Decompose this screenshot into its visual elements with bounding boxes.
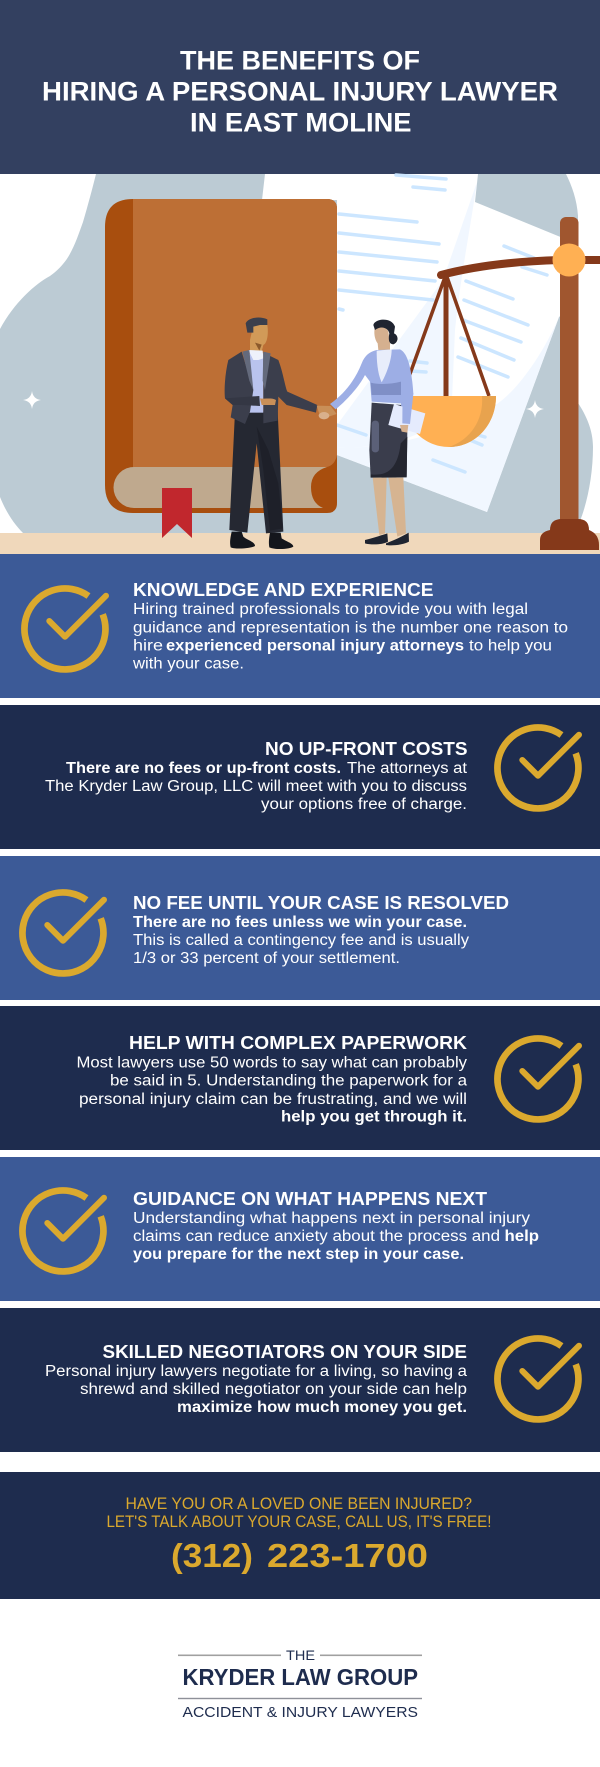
body text xyxy=(132,601,568,672)
body text xyxy=(133,1210,539,1263)
call to action text: LET'S TALK ABOUT YOUR CASE, CALL US, IT'S FREE! xyxy=(106,1513,492,1531)
body text: Hiring trained professionals to provide you with legal xyxy=(133,601,528,618)
body text xyxy=(45,1363,467,1416)
panel: no up-front costs xyxy=(0,705,600,849)
icon: check mark in circle xyxy=(22,892,104,973)
body text: shrewd and skilled negotiator on your side can help xyxy=(80,1381,467,1398)
title: IN EAST MOLINE xyxy=(190,108,412,138)
call to action text xyxy=(106,1495,492,1531)
law book xyxy=(105,199,337,513)
panel: skilled negotiators on your side xyxy=(0,1308,600,1452)
body text: help xyxy=(504,1228,539,1245)
body text: you prepare for the next step in your case. xyxy=(133,1246,464,1263)
phone number: (312) xyxy=(171,1537,253,1574)
body text xyxy=(133,914,469,967)
body text: The Kryder Law Group, LLC will meet with you to discuss xyxy=(45,778,467,795)
background blob xyxy=(0,174,593,533)
call to action panel xyxy=(0,1472,600,1599)
panel: guidance on what happens next xyxy=(0,1157,600,1301)
title xyxy=(42,46,558,138)
documents xyxy=(262,174,580,512)
body text: claims can reduce anxiety about the process and xyxy=(133,1228,500,1245)
logo: The Kryder Law Group: KRYDER LAW GROUP xyxy=(182,1664,418,1690)
icon: check mark in circle xyxy=(497,1038,579,1119)
body text: personal injury claim can be frustrating, and we will xyxy=(79,1091,467,1108)
body text: experienced personal injury attorneys xyxy=(166,638,464,654)
heading: HELP WITH COMPLEX PAPERWORK xyxy=(129,1033,467,1053)
illustration: lawyers shaking hands in front of a law book and scales xyxy=(0,174,600,554)
icon: check mark in circle xyxy=(497,727,579,808)
woman with document xyxy=(330,320,425,545)
body text: Personal injury lawyers negotiate for a living, so having a xyxy=(45,1363,467,1380)
scales of justice xyxy=(402,217,600,550)
heading: SKILLED NEGOTIATORS ON YOUR SIDE xyxy=(102,1342,467,1362)
body text: The attorneys at xyxy=(347,760,468,777)
bookmark xyxy=(162,488,192,538)
heading: KNOWLEDGE AND EXPERIENCE xyxy=(133,580,434,600)
body text: There are no fees or up-front costs. xyxy=(66,760,341,777)
phone number: 223-1700 xyxy=(267,1537,428,1574)
body text: hire xyxy=(133,638,163,654)
body text xyxy=(76,1054,467,1126)
body text: Most lawyers use 50 words to say what can probably xyxy=(76,1054,467,1072)
icon: check mark in circle xyxy=(24,588,106,669)
heading: GUIDANCE ON WHAT HAPPENS NEXT xyxy=(133,1189,487,1209)
call to action text: HAVE YOU OR A LOVED ONE BEEN INJURED? xyxy=(126,1495,472,1513)
body text: your options free of charge. xyxy=(261,796,467,813)
sparkle xyxy=(526,400,544,418)
body text xyxy=(45,760,468,813)
panel: knowledge and experience xyxy=(0,554,600,698)
panel: no fee until your case is resolved xyxy=(0,856,600,1000)
title: HIRING A PERSONAL INJURY LAWYER xyxy=(42,76,558,106)
logo: The Kryder Law Group: ACCIDENT & INJURY LAWYERS xyxy=(182,1705,418,1721)
heading: NO UP-FRONT COSTS xyxy=(265,739,468,759)
heading: NO FEE UNTIL YOUR CASE IS RESOLVED xyxy=(133,893,509,913)
floor xyxy=(0,533,600,554)
body text: guidance and representation is the number one reason to xyxy=(133,620,568,636)
sparkle xyxy=(23,391,41,409)
man in suit xyxy=(225,318,337,549)
icon: check mark in circle xyxy=(497,1338,579,1419)
body text: help you get through it. xyxy=(281,1108,467,1126)
body text: be said in 5. Understanding the paperwork for a xyxy=(110,1072,467,1090)
body text: 1/3 or 33 percent of your settlement. xyxy=(133,950,400,967)
body text: This is called a contingency fee and is usually xyxy=(133,932,469,949)
icon: check mark in circle xyxy=(22,1190,104,1271)
body text: Understanding what happens next in personal injury xyxy=(133,1210,530,1227)
title: THE BENEFITS OF xyxy=(180,46,420,76)
phone number xyxy=(171,1537,428,1574)
body text: maximize how much money you get. xyxy=(177,1399,467,1416)
logo: The Kryder Law Group xyxy=(178,1647,422,1721)
logo: The Kryder Law Group: THE xyxy=(286,1647,315,1663)
body text: with your case. xyxy=(132,656,244,672)
panel: help with complex paperwork xyxy=(0,1006,600,1150)
body text: to help you xyxy=(469,638,552,654)
header banner xyxy=(0,0,600,174)
body text: There are no fees unless we win your case. xyxy=(133,914,467,931)
